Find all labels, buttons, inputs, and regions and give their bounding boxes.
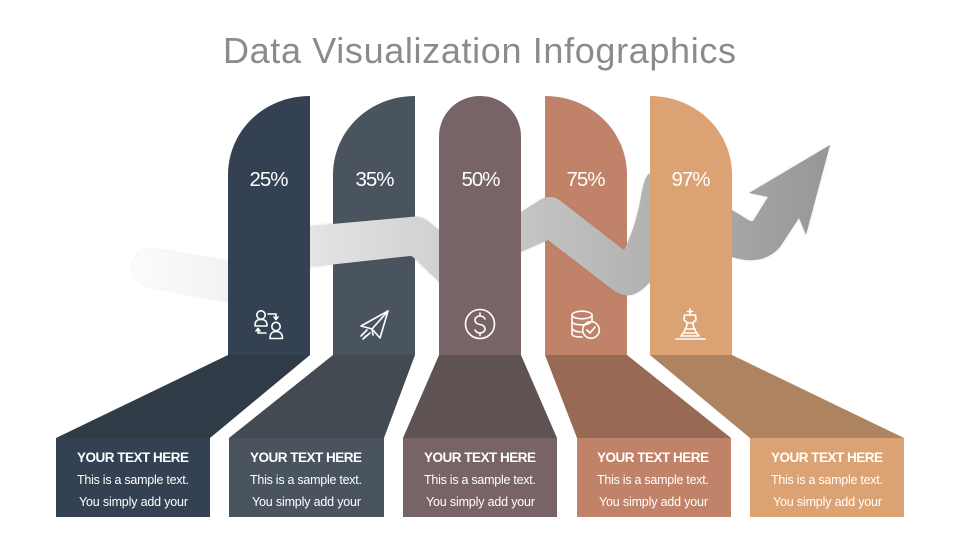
percentage: 25% — [250, 168, 288, 191]
body text: You simply add your — [599, 495, 708, 509]
text box — [403, 438, 557, 517]
heading: YOUR TEXT HERE — [424, 450, 536, 465]
fold — [56, 355, 310, 438]
body text — [77, 473, 189, 509]
fold — [403, 355, 557, 438]
percentage: 97% — [672, 168, 710, 191]
text box — [750, 438, 904, 517]
body text: You simply add your — [426, 495, 535, 509]
column — [439, 96, 521, 355]
body text: This is a sample text. — [424, 473, 536, 487]
body text — [771, 473, 883, 509]
icon: people exchange — [255, 311, 282, 338]
arrow ribbon — [133, 145, 830, 302]
percentage: 50% — [462, 168, 500, 191]
fold — [545, 355, 731, 438]
heading: YOUR TEXT HERE — [250, 450, 362, 465]
panel: 75% — [545, 96, 731, 517]
icon: paper plane — [361, 311, 388, 339]
heading: YOUR TEXT HERE — [771, 450, 883, 465]
panel: 35% — [229, 96, 415, 517]
heading: YOUR TEXT HERE — [597, 450, 709, 465]
column — [545, 96, 627, 355]
icon: dollar coin — [466, 310, 494, 338]
percentage: 75% — [566, 168, 606, 191]
column — [228, 96, 310, 355]
text box — [577, 438, 731, 517]
body text: This is a sample text. — [771, 473, 883, 487]
body text: This is a sample text. — [77, 473, 189, 487]
title: Data Visualization Infographics — [223, 30, 736, 71]
panel: 97% — [650, 96, 904, 517]
body text — [250, 473, 362, 509]
text box — [229, 438, 384, 517]
fold — [229, 355, 415, 438]
body text — [424, 473, 536, 509]
column — [650, 96, 732, 355]
fold — [650, 355, 904, 438]
column — [333, 96, 415, 355]
text box — [56, 438, 210, 517]
percentage: 35% — [356, 168, 394, 191]
body text: You simply add your — [773, 495, 882, 509]
body text: This is a sample text. — [597, 473, 709, 487]
panel: 25% — [56, 96, 310, 517]
body text: You simply add your — [79, 495, 188, 509]
icon: database check — [572, 311, 599, 338]
heading: YOUR TEXT HERE — [77, 450, 189, 465]
body text: This is a sample text. — [250, 473, 362, 487]
body text — [597, 473, 709, 509]
body text: You simply add your — [252, 495, 361, 509]
panel: 50% — [403, 96, 557, 517]
icon: chess king — [676, 309, 705, 339]
